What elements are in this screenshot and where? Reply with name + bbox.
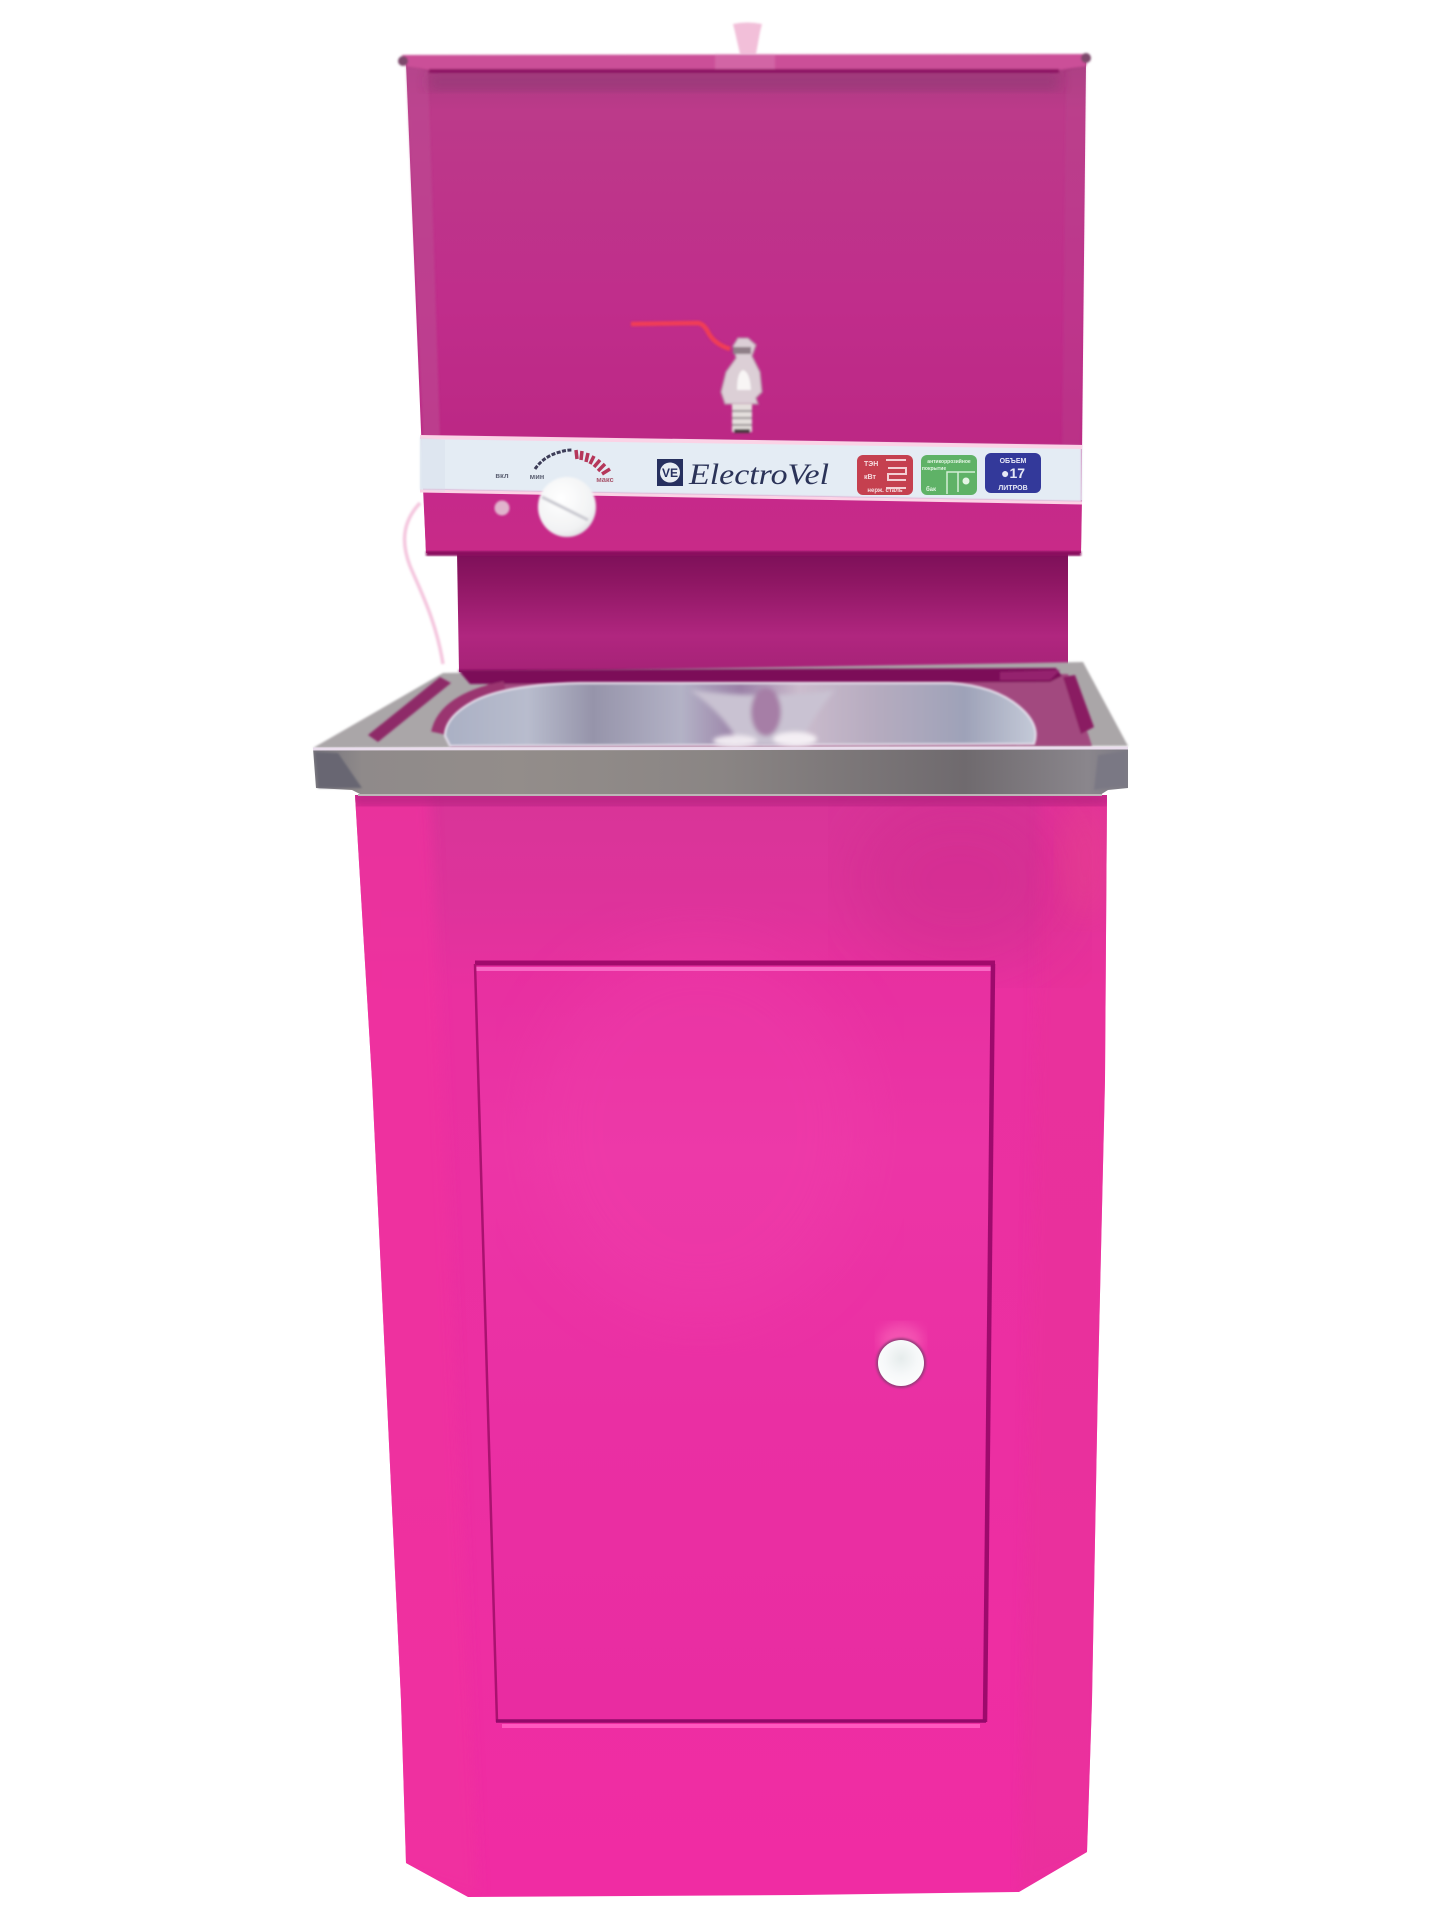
indicator lamp: [494, 500, 510, 516]
tank lower front section: [423, 488, 1082, 553]
dial scale: [535, 450, 610, 474]
blue volume label: ОБЪЕМ: [1000, 458, 1027, 465]
green tank label: покрытие: [922, 466, 946, 472]
dial labels: [495, 471, 614, 484]
tank side lighter edges: [406, 62, 1086, 447]
tank top rim: [398, 53, 1091, 91]
faucet with red lever: [631, 323, 762, 433]
power cord: [405, 503, 443, 664]
door handle: [876, 1324, 926, 1388]
backsplash panel: [457, 552, 1068, 672]
blue volume label: ●17: [1001, 465, 1025, 481]
red lever: [631, 323, 730, 349]
green tank label: бак: [926, 486, 936, 493]
blue volume label: [985, 453, 1041, 493]
water tank: [398, 22, 1091, 556]
dial labels: макс: [596, 475, 614, 484]
sink deck: [313, 662, 1128, 748]
cabinet door: [475, 940, 995, 1726]
red heater label: кВт: [864, 474, 876, 481]
blue volume label: ЛИТРОВ: [998, 485, 1028, 492]
cabinet body: [340, 790, 1120, 1897]
cabinet top right tint: [948, 935, 949, 936]
illustration: pink washbasin with water heater: [313, 22, 1128, 1897]
lip corner folds: [315, 751, 1126, 790]
tank bottom edge shadow: [426, 551, 1081, 556]
green tank label: [921, 455, 977, 495]
hose connector: [732, 404, 752, 432]
dial labels: мин: [530, 472, 544, 481]
thermostat knob: [538, 477, 596, 537]
basin drain reflection: [690, 688, 835, 747]
brand name: ElectroVel: [688, 458, 829, 491]
logo mark: VE: [662, 466, 678, 480]
basin bowl: [445, 683, 1036, 746]
stainless sink: [313, 662, 1128, 795]
white control band: [420, 437, 1082, 503]
cabinet side folds: [340, 790, 1120, 1897]
red heater label: нерж. сталь: [867, 488, 903, 494]
valve body: [721, 338, 762, 404]
front lip: [313, 747, 1128, 795]
pink reflections on deck: [368, 668, 1094, 747]
green tank label: антикоррозийное: [927, 458, 971, 465]
dial labels: вкл: [495, 471, 509, 480]
door sheen: [530, 940, 870, 1320]
logo mark: [657, 459, 683, 486]
tank lid knob: [733, 22, 762, 54]
door edges: [475, 963, 995, 1726]
red heater label: ТЭН: [864, 461, 878, 468]
tank body: [406, 62, 1086, 553]
red heater label: [857, 455, 913, 495]
